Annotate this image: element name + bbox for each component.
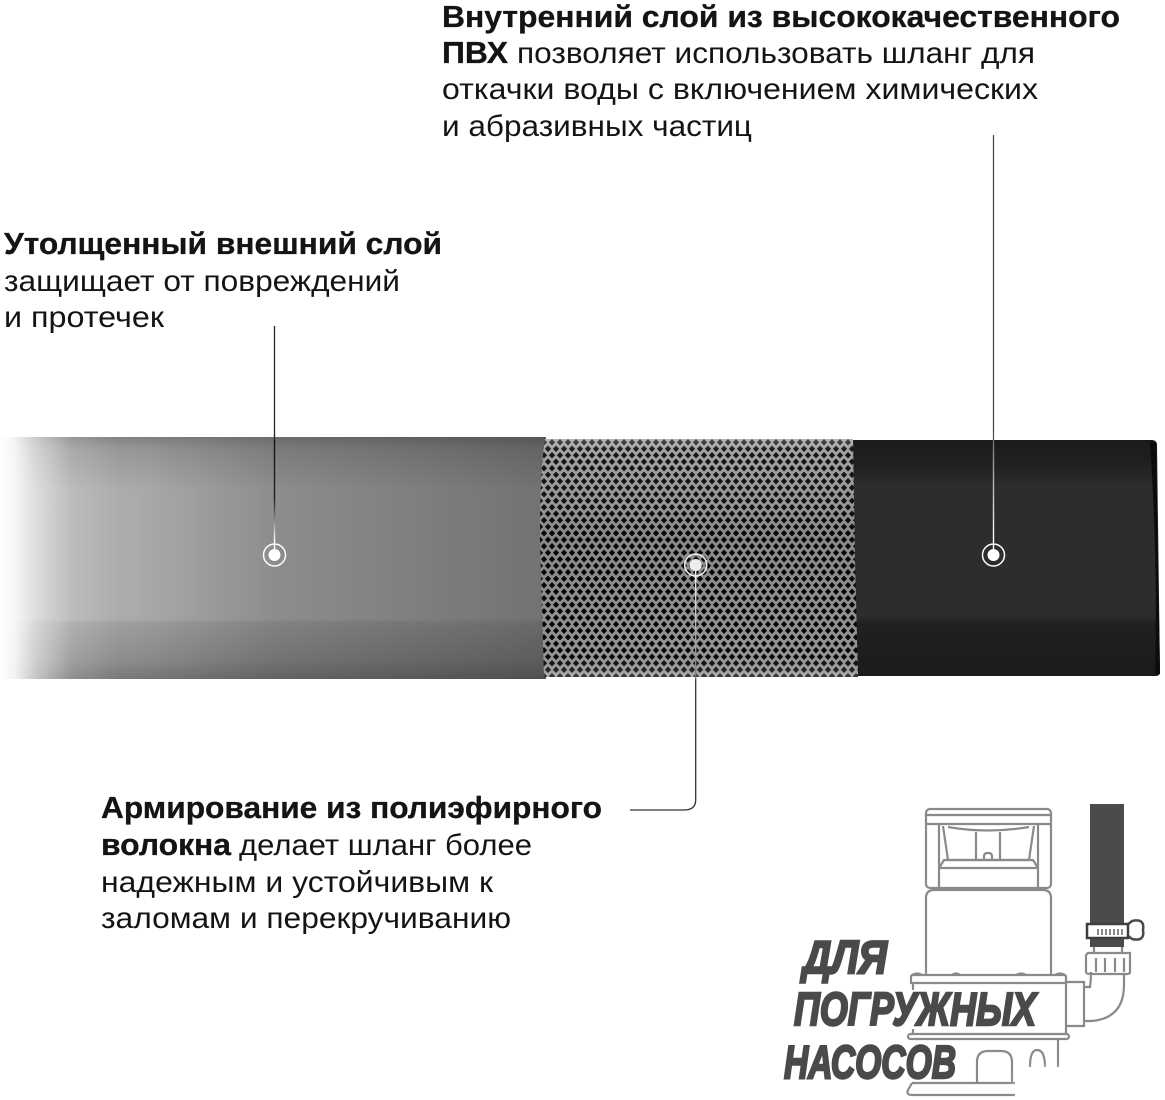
hose clamp xyxy=(1087,920,1143,940)
text: inner layer: Внутренний слой из высококачественного xyxy=(442,0,1120,34)
label: for submersible pumps: НАСОСОВ xyxy=(784,1036,956,1088)
text: reinforcement: делает шланг более xyxy=(239,829,532,862)
text: reinforcement: волокна xyxy=(101,828,232,862)
watermark smudge xyxy=(1018,1071,1072,1097)
text: reinforcement xyxy=(101,791,602,935)
text: reinforcement: Армирование из полиэфирного xyxy=(101,791,602,825)
label: for submersible pumps: ПОГРУЖНЫХ xyxy=(794,983,1038,1035)
pump line art xyxy=(908,809,1130,1095)
leader line: inner layer xyxy=(982,135,1004,566)
text: inner layer: и абразивных частиц xyxy=(442,110,752,143)
icon: submersible pump with hose xyxy=(908,804,1143,1097)
hose cutaway xyxy=(0,436,1160,680)
text: reinforcement: заломам и перекручиванию xyxy=(101,902,511,935)
pump hose xyxy=(1090,804,1124,947)
hose: black inner layer xyxy=(852,440,1160,676)
text: outer layer xyxy=(4,227,442,334)
text: outer layer: Утолщенный внешний слой xyxy=(4,227,442,261)
text: inner layer: позволяет использовать шланг для xyxy=(517,37,1035,70)
hose: grey outer layer xyxy=(0,436,546,680)
text: outer layer: и протечек xyxy=(4,301,165,334)
label: for submersible pumps: ДЛЯ xyxy=(800,931,888,983)
text: inner layer xyxy=(442,0,1120,143)
text: inner layer: откачки воды с включением химических xyxy=(442,73,1038,106)
text: reinforcement: надежным и устойчивым к xyxy=(101,866,494,899)
label: for submersible pumps xyxy=(784,931,1038,1088)
hose: polyester mesh reinforcement xyxy=(540,439,858,677)
leader line: outer layer xyxy=(264,326,286,566)
text: inner layer: ПВХ xyxy=(442,36,509,70)
text: outer layer: защищает от повреждений xyxy=(4,265,400,298)
leader line: mesh layer xyxy=(630,554,707,810)
